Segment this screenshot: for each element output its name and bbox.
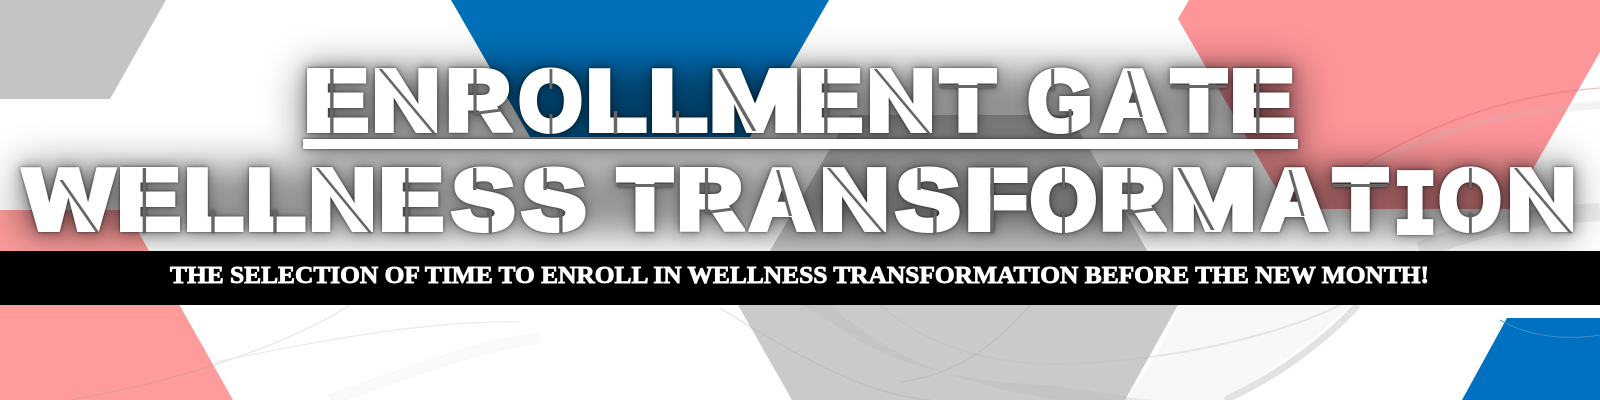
- title line 1: T: [941, 54, 995, 149]
- title line 2: N: [820, 153, 890, 248]
- title line 2: N: [1507, 153, 1577, 248]
- title line 2: O: [1439, 153, 1501, 248]
- title line 2: T: [618, 153, 672, 248]
- title line 2: R: [677, 153, 742, 248]
- title line 2: E: [117, 153, 181, 248]
- title line 1: O: [519, 54, 582, 149]
- title line 2: F: [965, 153, 1028, 248]
- soft dark shadow behind title: [0, 40, 1600, 251]
- title line 2: W: [24, 153, 113, 248]
- title line 2: M: [1170, 153, 1257, 248]
- title line 2: O: [1030, 153, 1097, 248]
- title line 2: A: [750, 153, 814, 248]
- title line 2: L: [246, 153, 305, 248]
- pink shape bottom left: [0, 210, 233, 400]
- title line 2: R: [1100, 153, 1164, 248]
- title line 2: T: [1334, 153, 1387, 248]
- title line 1: L: [586, 54, 646, 149]
- grey hexagon center: [738, 115, 1178, 400]
- title line 1: E: [798, 54, 863, 149]
- title block: [13, 54, 1582, 259]
- grey parallelogram top left: [0, 0, 166, 99]
- title line 2: E: [379, 153, 444, 248]
- title line 2: S: [522, 153, 586, 248]
- title line 2: A: [1262, 153, 1327, 248]
- title line 2: L: [184, 153, 243, 248]
- title line 2: I: [1394, 158, 1436, 259]
- black subtitle bar: [0, 251, 1600, 305]
- title line 1: M: [709, 54, 801, 149]
- title line 2: S: [896, 153, 960, 248]
- title line 2: N: [308, 153, 375, 248]
- title line 1: G: [1028, 54, 1092, 149]
- blue shape bottom right: [1462, 318, 1600, 400]
- translucent wave ribbons: [70, 88, 1600, 400]
- title line 1: A: [1101, 54, 1165, 149]
- title line 1: E: [304, 54, 369, 149]
- title line 2: [13, 153, 1582, 259]
- title line 1: [298, 54, 1302, 149]
- title line 1: R: [446, 54, 510, 149]
- title line 1: L: [649, 54, 707, 149]
- title underline: [303, 139, 1298, 149]
- pink hexagon top right: [1178, 0, 1600, 209]
- subtitle: THE SELECTION OF TIME TO ENROLL IN WELLNESS TRANSFORMATION BEFORE THE NEW MONTH!: [170, 263, 1429, 289]
- blue trapezoid top: [451, 0, 829, 137]
- title line 1: N: [867, 54, 936, 149]
- title line 1: T: [1172, 54, 1226, 149]
- title line 2: S: [452, 153, 515, 248]
- title line 1: N: [372, 54, 441, 149]
- title line 1: E: [1230, 54, 1295, 149]
